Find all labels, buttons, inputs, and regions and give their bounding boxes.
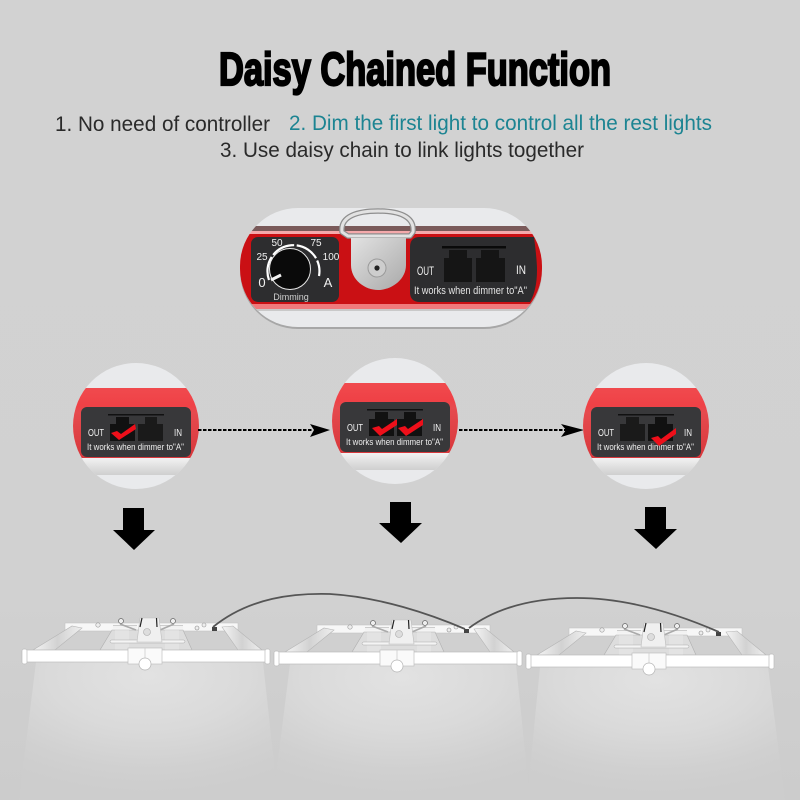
panel: last light port (IN): IN [684,428,692,439]
text: point 3: 3. Use daisy chain to link lights together [220,139,584,162]
arrow: dotted 2 to 3 [459,424,584,437]
light fixture 1 [22,618,270,670]
arrow: down 1 [113,508,155,550]
dimming dial panel: Dimming [273,292,309,302]
dimming dial panel: 25 [256,252,268,263]
panel: first light port (OUT): OUT [88,428,104,439]
dimming dial panel: 75 [310,238,322,249]
arrow: down 2 [379,502,422,543]
text: point 1: 1. No need of controller [55,113,270,136]
light fixture 2 [274,620,522,672]
ports panel [410,237,537,302]
dimming dial panel: A [324,275,333,290]
arrow: down 3 [634,507,677,549]
daisy chain cable 1 [213,594,465,629]
check mark [111,424,136,440]
panel: first light port (OUT): It works when dimmer to"A" [87,442,184,453]
panel: dimmer close-up [240,208,542,329]
light fixture 3 [526,623,774,675]
light beam 3 [527,667,785,800]
panel: middle light ports (OUT and IN): It works when dimmer to"A" [346,437,443,448]
panel: first light port (OUT) [73,363,199,489]
text: point 2: 2. Dim the first light to control all the rest lights [289,112,712,135]
light beam 2 [273,664,530,800]
panel: first light port (OUT): IN [174,428,182,439]
ports panel: IN [516,263,526,277]
daisy chain cable 2 [469,598,719,632]
ports panel: OUT [417,264,434,278]
panel: middle light ports (OUT and IN): OUT [347,423,363,434]
check marks [372,419,423,436]
dimming dial panel [251,237,340,302]
dimming dial panel: 0 [258,275,266,290]
panel: last light port (IN): OUT [598,428,614,439]
panel: middle light ports (OUT and IN) [332,358,458,484]
title: Daisy Chained Function [219,43,611,95]
ports panel: It works when dimmer to"A" [414,285,527,297]
panel: last light port (IN): It works when dimmer to"A" [597,442,694,453]
dimming dial panel: 100 [323,252,340,263]
light beam 1 [19,662,278,800]
check mark [651,428,676,446]
panel: middle light ports (OUT and IN): IN [433,423,441,434]
panel: last light port (IN) [583,363,709,489]
arrow: dotted 1 to 2 [198,424,330,437]
hanging D-ring [342,211,413,290]
dimming dial panel: 50 [271,238,283,249]
